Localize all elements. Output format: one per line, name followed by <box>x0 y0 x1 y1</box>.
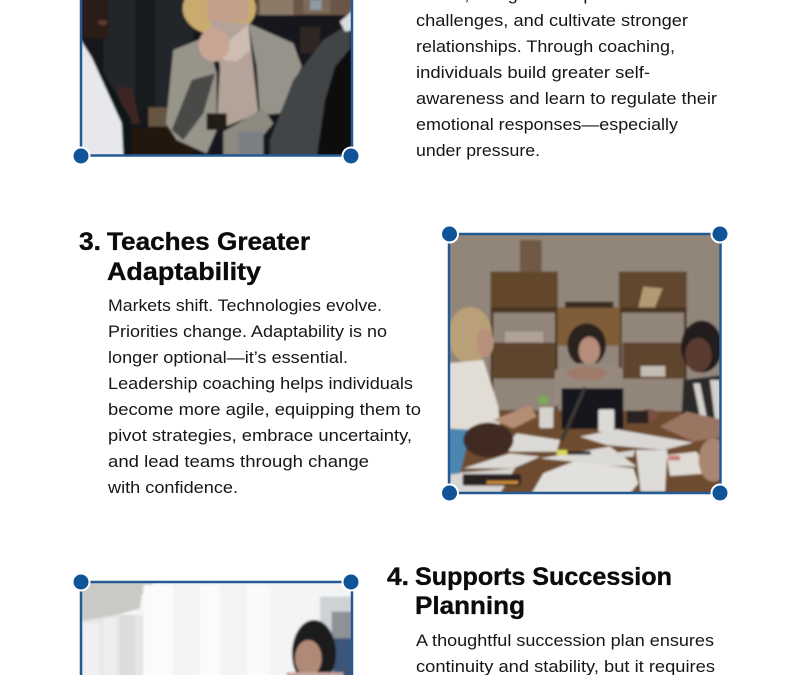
text block: section 3 body copy: longer optional—it’s essential. <box>108 348 348 367</box>
text block: section 3 body copy: Priorities change. Adaptability is no <box>108 322 387 341</box>
heading: 3. Teaches Greater Adaptability <box>79 228 310 286</box>
text block: section 4 body copy: A thoughtful succession plan ensures <box>416 631 714 650</box>
text block: section 2 body copy <box>416 0 717 160</box>
text block: section 3 body copy <box>107 296 421 497</box>
text block: section 3 body copy: and lead teams through change <box>108 452 369 471</box>
text block: section 3 body copy: Leadership coaching helps individuals <box>108 374 413 393</box>
heading: 4. Supports Succession Planning <box>387 563 672 620</box>
heading: 4. Supports Succession Planning: Supports Succession <box>415 563 672 591</box>
text block: section 2 body copy: challenges, and cultivate stronger <box>416 11 688 30</box>
text block: section 2 body copy: under pressure. <box>416 141 540 160</box>
text block: section 2 body copy: individuals build greater self- <box>416 63 650 82</box>
text block: section 3 body copy: pivot strategies, embrace uncertainty, <box>108 426 412 445</box>
text block: section 2 body copy: relationships. Through coaching, <box>416 37 675 56</box>
heading: 3. Teaches Greater Adaptability: Adaptability <box>107 258 261 286</box>
panel: section 2 photo, woman in grey blazer at meeting <box>72 0 360 165</box>
text block: section 3 body copy: Markets shift. Technologies evolve. <box>108 296 382 315</box>
panel: section 4 photo, woman by white curtains <box>72 574 360 675</box>
text block: section 4 body copy <box>416 631 715 675</box>
heading: 3. Teaches Greater Adaptability: Teaches Greater <box>107 228 310 256</box>
text block: section 2 body copy: emotional responses—especially <box>416 115 679 134</box>
panel: section 3 photo, team around a table <box>441 226 728 502</box>
heading: 3. Teaches Greater Adaptability: 3. <box>79 228 101 256</box>
text block: section 2 body copy: awareness and learn to regulate their <box>416 89 717 108</box>
heading: 4. Supports Succession Planning: Planning <box>415 592 525 620</box>
text block: section 3 body copy: become more agile, equipping them to <box>108 400 421 419</box>
text block: section 3 body copy: with confidence. <box>107 478 238 497</box>
heading: 4. Supports Succession Planning: 4. <box>387 563 409 591</box>
